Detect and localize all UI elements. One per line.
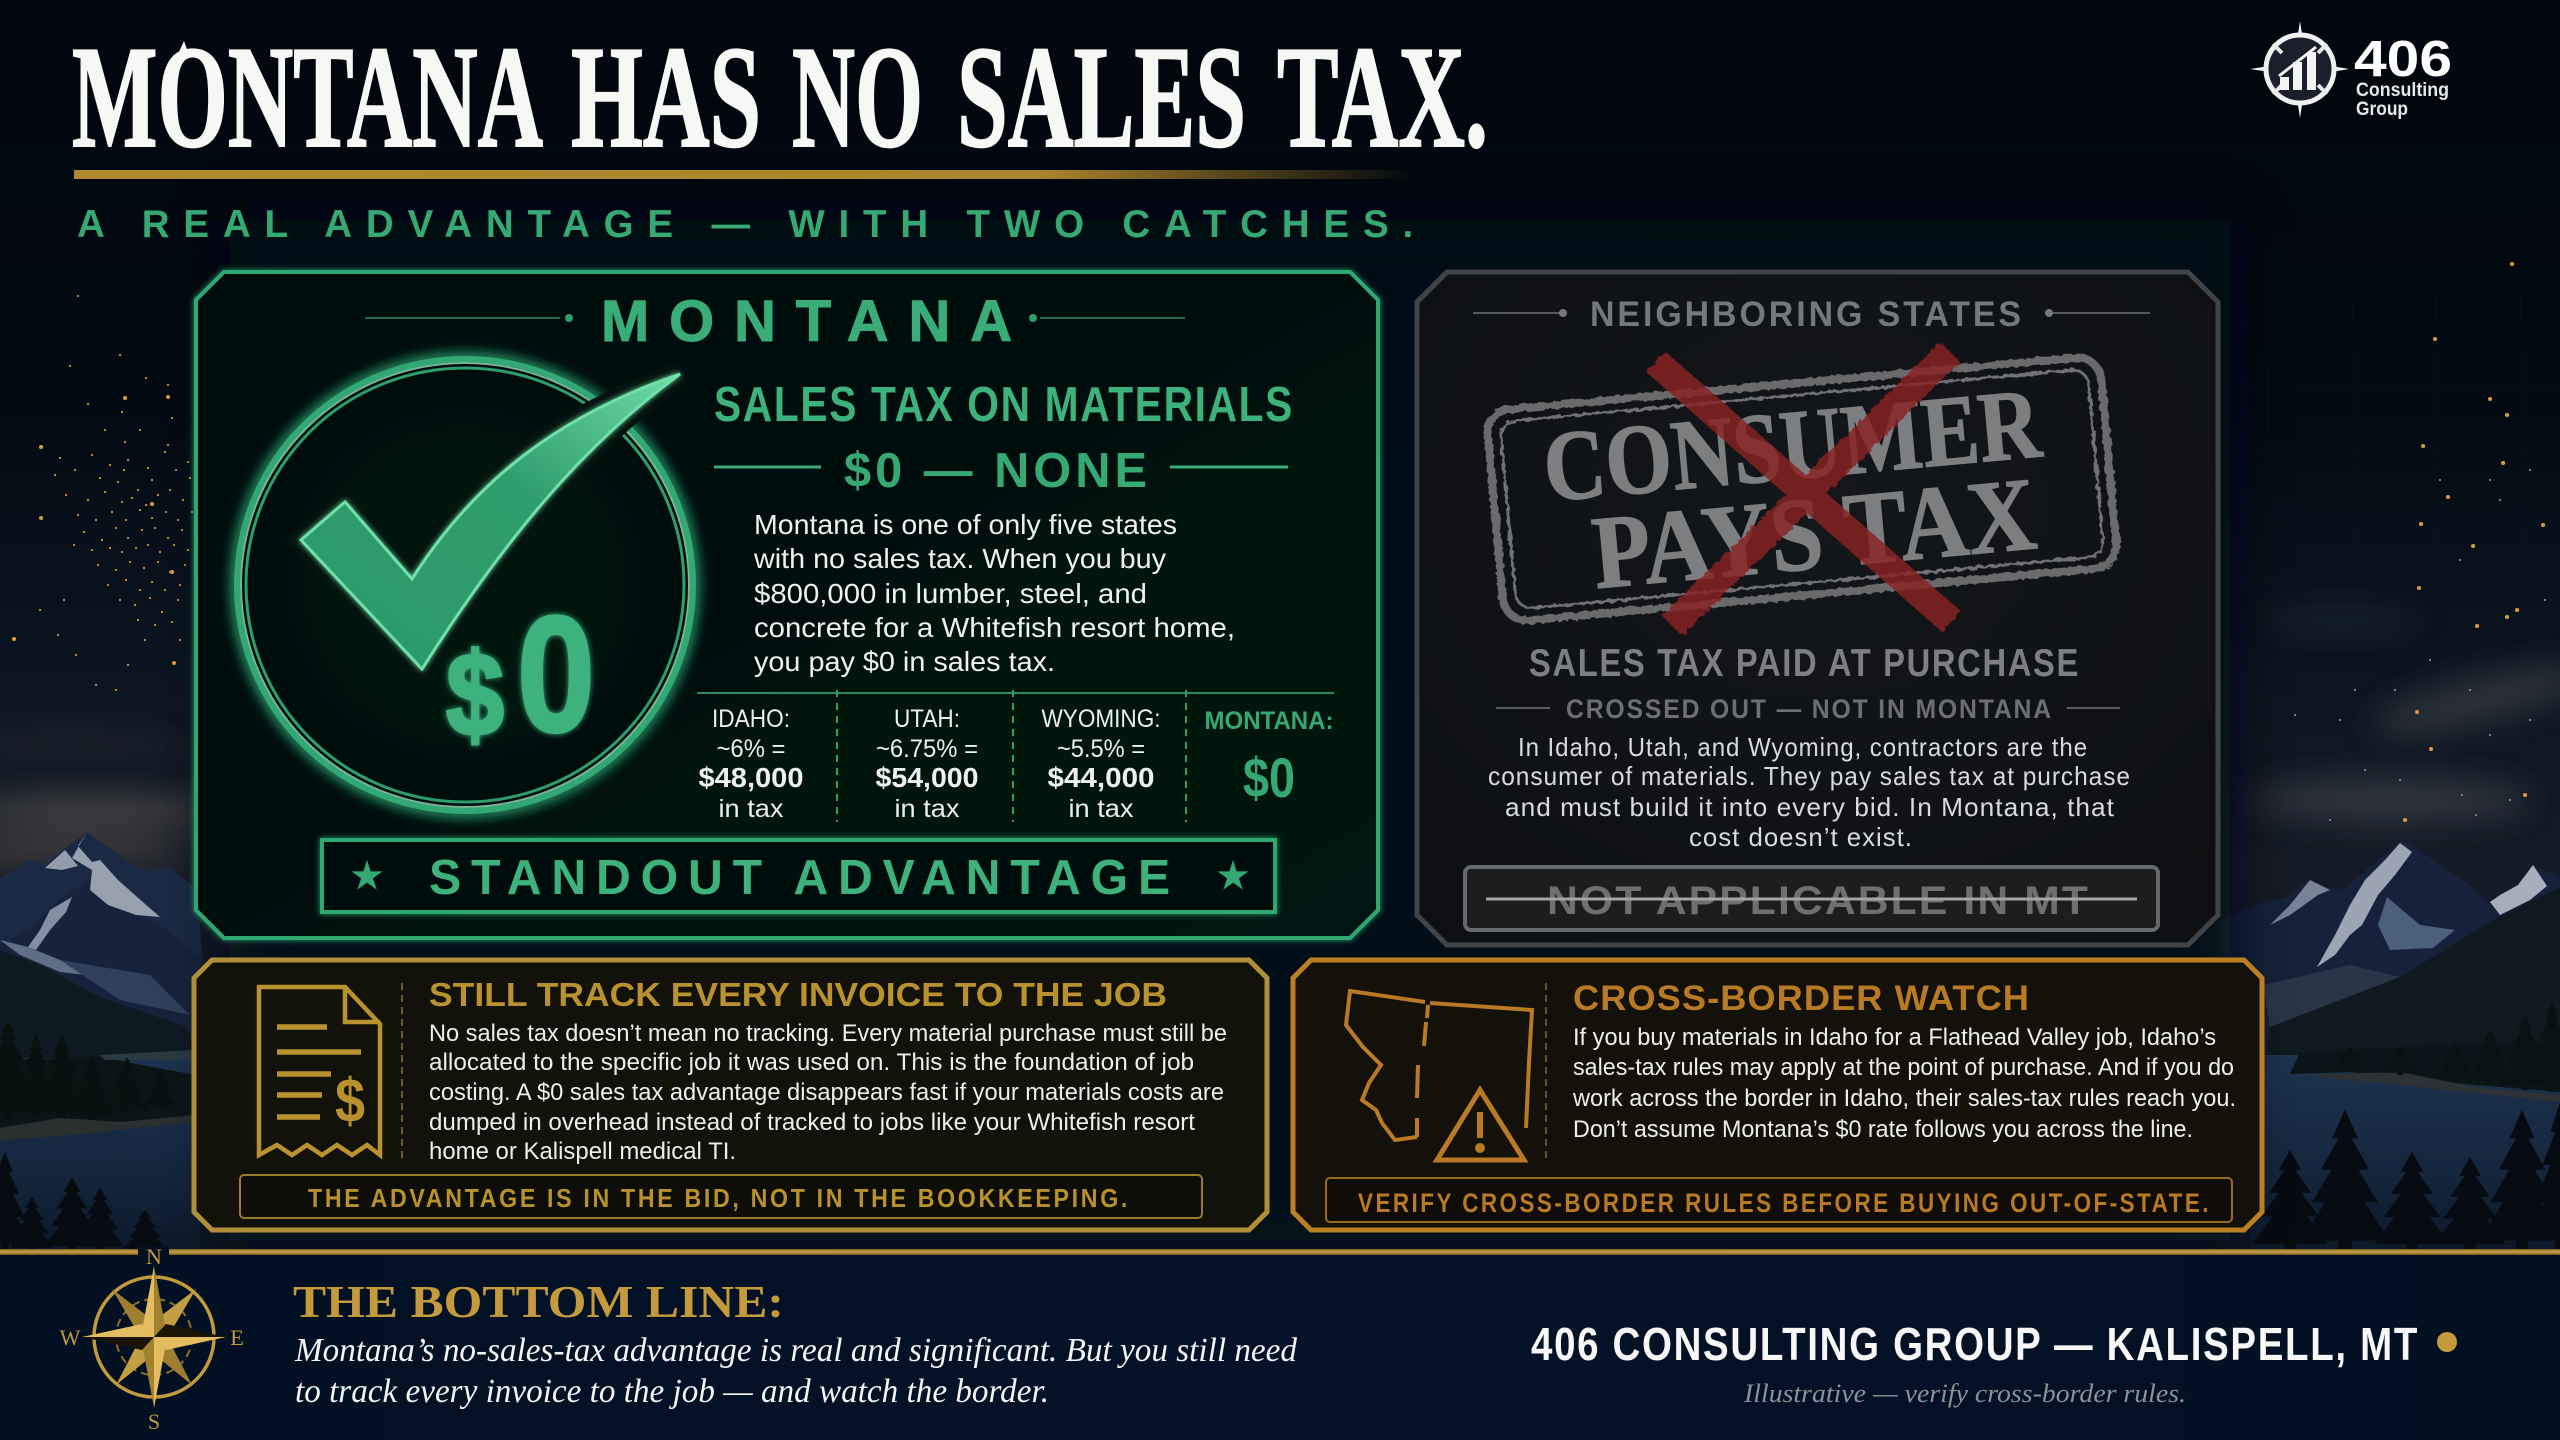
panel: neighboring states [1417,272,2218,945]
column: Idaho: ~6% = [716,735,786,763]
panel heading: MONTANA: MONTANA [601,289,1032,354]
subheading: crossed out: CROSSED OUT — NOT IN MONTANA [1566,694,2053,724]
body text: Montana is one of only five states [754,509,1177,540]
right mountains [2217,839,2560,1060]
column: Wyoming: $44,000 [1048,762,1154,793]
panel: cross-border watch [1293,960,2262,1230]
big $0: 0 [517,582,595,766]
body text [1572,1024,2236,1143]
sparks and stars [14,264,2545,820]
icon: compass rose: E [230,1325,244,1350]
big $0: $ [446,629,504,761]
title: TAX. [1277,16,1488,178]
logo: 406 Consulting Group: Consulting [2356,80,2449,101]
right shoreline trees [2290,1002,2560,1102]
stamp: consumer pays tax: CONSUMER [1539,367,2047,523]
body text [1488,732,2131,852]
column: Utah: ~6.75% = [876,735,978,763]
badge: not applicable in MT [1465,867,2158,930]
heading: STILL TRACK EVERY INVOICE TO THE JOB [429,976,1167,1013]
body text: In Idaho, Utah, and Wyoming, contractors are the [1518,732,2088,762]
heading: sales tax paid at purchase: SALES TAX PAID AT PURCHASE [1529,642,2080,685]
logo: 406 Consulting Group: Group [2356,99,2408,120]
body text: home or Kalispell medical TI. [429,1138,736,1165]
column: Utah: UTAH: [894,705,960,733]
column: Wyoming: in tax [1068,795,1134,823]
icon: compass chart [2250,21,2349,118]
column: Montana: MONTANA: [1204,707,1334,735]
column: Idaho: IDAHO: [712,705,790,733]
logo: 406 Consulting Group: 406 [2354,30,2452,87]
panel heading: MONTANA [365,289,1185,354]
icon: large checkmark in ring [237,359,693,811]
central dark backing [230,220,2230,1240]
body text: you pay $0 in sales tax. [754,646,1055,677]
icon: invoice with dollar sign [259,987,380,1155]
icon: compass rose [60,1244,244,1434]
callout: advantage in the bid: THE ADVANTAGE IS IN THE BID, NOT IN THE BOOKKEEPING. [308,1183,1130,1213]
foreground trees [0,1102,2560,1252]
left shoreline trees [0,1020,195,1140]
left lake [0,1058,200,1250]
callout: verify rules [1326,1178,2232,1222]
body text: costing. A $0 sales tax advantage disappears fast if your materials costs are [429,1079,1224,1106]
column: Utah: $54,000 [876,762,978,793]
body text: consumer of materials. They pay sales tax at purchase [1488,761,2131,791]
icon: compass rose: W [60,1325,81,1350]
body text [429,1020,1227,1165]
column: Utah [876,705,978,823]
heading: $0 none: $0 — NONE [844,444,1151,498]
column: Montana [1204,707,1334,809]
footer band [0,1244,2560,1440]
body text: dumped in overhead instead of tracked to jobs like your Whitefish resort [429,1109,1195,1136]
title [72,16,1488,178]
column: Wyoming: WYOMING: [1042,705,1160,733]
body text: sales-tax rules may apply at the point of purchase. And if you do [1573,1054,2234,1081]
body text: If you buy materials in Idaho for a Flathead Valley job, Idaho’s [1573,1024,2216,1051]
badge: standout advantage: ★ [351,855,383,896]
badge: standout advantage: ★ [1217,855,1249,896]
logo: 406 Consulting Group [2250,21,2452,120]
title: NO [792,16,923,178]
column: Montana: $0 [1243,746,1295,809]
body text: concrete for a Whitefish resort home, [754,612,1235,643]
right lake [2250,1055,2560,1250]
icon: compass rose: S [148,1409,160,1434]
stamp: consumer pays tax [1486,356,2118,622]
callout: advantage in the bid [240,1175,1202,1218]
body text: Don’t assume Montana’s $0 rate follows you across the line. [1573,1116,2193,1143]
bottom line text: Montana’s no-sales-tax advantage is real and significant. But you still need [294,1332,1298,1369]
heading: neighboring states: NEIGHBORING STATES [1590,295,2024,334]
heading: neighboring states [1473,295,2150,334]
left mountain [0,832,210,1070]
heading: CROSS-BORDER WATCH [1573,979,2030,1018]
subtitle: A REAL ADVANTAGE — WITH TWO CATCHES. [77,203,1427,246]
title: MONTANA [72,16,543,178]
column: Wyoming [1042,705,1160,823]
comparison table [697,690,1334,823]
icon: compass rose: N [146,1244,162,1269]
column: Idaho [698,705,804,823]
title: SALES [957,16,1246,178]
body text: No sales tax doesn’t mean no tracking. Every material purchase must still be [429,1020,1227,1047]
body text: allocated to the specific job it was used on. This is the foundation of job [429,1049,1194,1076]
badge: standout advantage: STANDOUT ADVANTAGE [429,851,1180,905]
body text: cost doesn’t exist. [1689,822,1913,852]
stamp: consumer pays tax: PAYS TAX [1588,456,2040,611]
icon: Montana outline with warning triangle [1346,991,1532,1160]
bottom line text: to track every invoice to the job — and watch the border. [295,1373,1049,1410]
gold title rule [74,170,1414,179]
big $0 [446,582,595,766]
bottom line text [294,1332,1298,1410]
heading: the bottom line: THE BOTTOM LINE: [293,1276,784,1327]
panel: Montana [196,272,1378,938]
badge: standout advantage [322,840,1275,912]
red X [1656,352,1952,626]
badge: not applicable in MT: NOT APPLICABLE IN MT [1547,879,2090,923]
body text [753,509,1235,677]
callout: verify rules: VERIFY CROSS-BORDER RULES BEFORE BUYING OUT-OF-STATE. [1358,1188,2211,1218]
body text: and must build it into every bid. In Montana, that [1505,792,2115,822]
title: HAS [571,16,761,178]
body text: work across the border in Idaho, their sales-tax rules reach you. [1572,1085,2236,1112]
icon: invoice with dollar sign: $ [335,1067,365,1136]
disclaimer: Illustrative — verify cross-border rules. [1743,1379,2186,1408]
column: Wyoming: ~5.5% = [1057,735,1145,763]
panel: still track every invoice [194,960,1267,1230]
heading: sales tax on materials: SALES TAX ON MATERIALS [714,378,1294,432]
body text: $800,000 in lumber, steel, and [754,578,1147,609]
column: Utah: in tax [894,795,960,823]
column: Idaho: in tax [718,795,784,823]
body text: with no sales tax. When you buy [753,543,1166,574]
column: Idaho: $48,000 [698,762,804,793]
